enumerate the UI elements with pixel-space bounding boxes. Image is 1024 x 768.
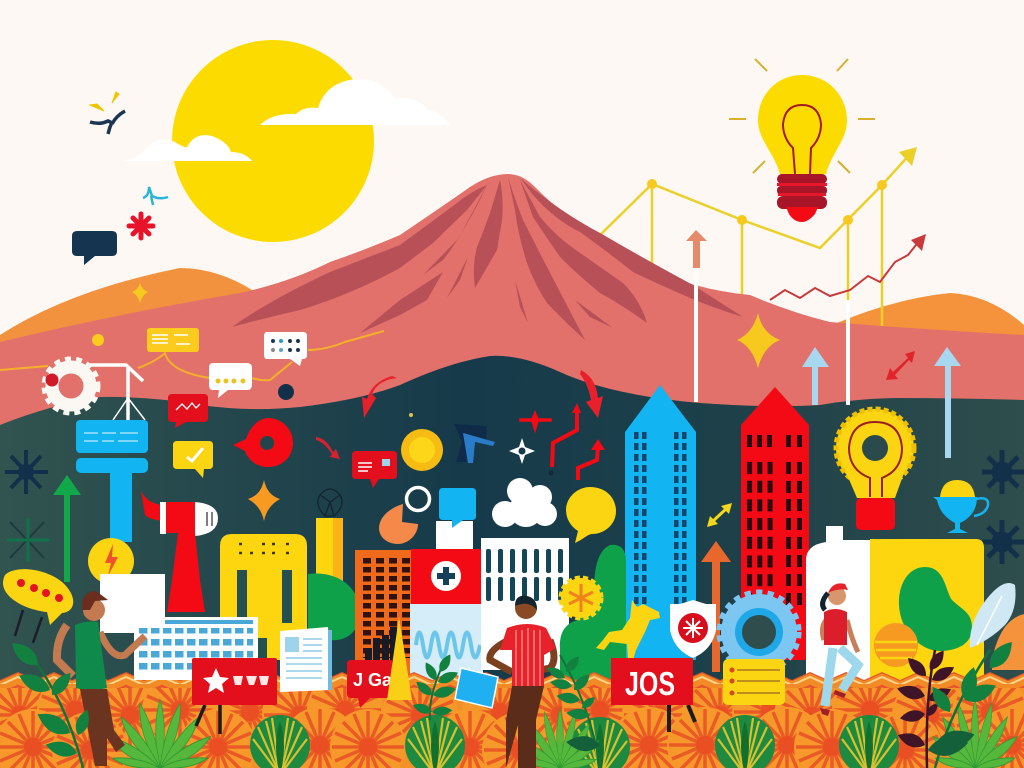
sign: red JGa: J Ga — [353, 670, 393, 690]
icon: shield — [670, 600, 716, 658]
arrow: yellow diagonal double — [707, 503, 732, 527]
icon: white dots bubble — [264, 332, 307, 366]
icon: lightning circle — [88, 538, 134, 584]
building: red medical — [411, 549, 481, 604]
ground base — [0, 684, 1024, 768]
icon: red asterisk — [129, 214, 153, 238]
arrow: white pole with orange head — [686, 230, 707, 402]
icon: red squiggle arrows — [548, 403, 605, 480]
icon: navy speech bubble — [72, 231, 117, 265]
icon: yellow check bubble — [173, 441, 213, 478]
icon: orange pie — [379, 504, 418, 544]
icon: red double arrow — [886, 351, 915, 380]
icon: white crane tower — [90, 365, 145, 420]
yellow checklist panel — [723, 659, 785, 705]
foliage: sprig by red shirt man — [545, 653, 601, 768]
green round tree — [308, 573, 360, 640]
sign: red JOS: JOS — [625, 665, 675, 702]
foliage: left sprig — [7, 637, 93, 768]
yellow triangle — [387, 617, 412, 700]
arrow: blue up left — [802, 347, 829, 405]
person: man in red shirt — [490, 596, 556, 768]
orange hill patch right — [992, 614, 1024, 670]
timeline orange path — [0, 331, 384, 380]
arrow: red small curved — [316, 437, 340, 459]
icon: white gear with red badge — [44, 359, 98, 413]
icon: red donut marker — [233, 418, 293, 467]
icon: blue square card — [455, 668, 498, 708]
icon: small star on hill — [132, 283, 148, 303]
arrow: red curved left — [362, 376, 397, 418]
arrow: orange up — [701, 541, 731, 672]
icon: yellow dot — [92, 334, 104, 346]
icon: white block — [436, 521, 473, 549]
icon: white sparkle — [509, 438, 535, 464]
building: pale blue with wave — [410, 604, 483, 680]
icon: light bulb — [729, 59, 875, 222]
sign: red JOS — [611, 658, 695, 732]
icon: blue cup — [933, 480, 988, 533]
palm plants — [110, 699, 1017, 768]
icon: blue gear — [721, 594, 797, 670]
tower: blue skyscraper — [625, 385, 696, 660]
icon: orange striped sun — [874, 623, 918, 667]
tower: red skyscraper — [741, 387, 809, 660]
document panel — [280, 627, 332, 692]
foliage: dark plum sprig — [895, 647, 957, 768]
icon: navy starburst right top — [982, 450, 1024, 494]
icon: green starburst left — [7, 518, 50, 562]
tower: small yellow — [316, 518, 343, 588]
green blob tree centre — [560, 545, 626, 690]
icon: red cross mark — [520, 412, 551, 431]
sign: red JGa — [347, 660, 393, 708]
icon: yellow gear bulb — [836, 409, 914, 530]
ground zigzag band — [0, 672, 1024, 688]
arrow: white pole behind — [846, 300, 850, 405]
icon: dark wire bulb — [318, 489, 342, 516]
sun — [172, 40, 374, 242]
icon: navy starburst right bottom — [982, 520, 1024, 564]
ground flower pattern — [0, 688, 1024, 768]
icon: white square sign — [100, 574, 165, 633]
icon: bird with ticks — [90, 92, 125, 134]
arrow: blue up right — [934, 347, 961, 458]
foliage: sprig by blue card — [411, 652, 460, 720]
yellow rising line chart — [600, 147, 917, 330]
icon: yellow round bubble — [566, 487, 616, 543]
building: white and yellow right — [806, 526, 984, 680]
green bean tree right — [899, 567, 972, 651]
icon: red media bubble — [352, 451, 397, 488]
mountain ridges — [232, 177, 743, 340]
icon: small cyan bird — [143, 187, 168, 205]
orange back hill right — [800, 293, 1024, 360]
icon: yellow gear flower — [561, 578, 601, 618]
person: man in green tank — [57, 591, 145, 766]
arrow: green up — [53, 475, 81, 582]
red trend line with arrow — [770, 234, 926, 300]
icon: yellow note bubble — [147, 328, 199, 352]
dark lower hill — [0, 356, 1024, 700]
icon: red chart bubble — [168, 394, 208, 428]
person: woman with red cap — [820, 583, 858, 716]
icon: yellow ellipse bubble on stand — [3, 569, 73, 643]
cloud: right — [260, 79, 450, 125]
icon: yellow four-point star — [737, 313, 780, 368]
icon: tiny speck — [409, 413, 413, 417]
icon: orange star — [248, 480, 280, 521]
building: orange grid — [355, 550, 413, 680]
icon: navy starburst left — [5, 450, 48, 494]
cloud: left — [123, 135, 252, 161]
icon: white cloud — [492, 478, 557, 527]
tower: cyan water tower — [76, 420, 148, 542]
icon: pale feather — [970, 583, 1016, 648]
icon: gold coin — [401, 429, 443, 471]
icon: white ellipsis bubble — [209, 363, 252, 398]
foliage: right green sprig — [926, 637, 1018, 768]
pink mountain and hill band — [0, 174, 1024, 440]
orange back hill left — [0, 268, 300, 360]
icon: navy dot — [278, 384, 294, 400]
calendar panel — [134, 617, 258, 680]
shrub row — [250, 715, 899, 768]
sign: red star rating — [192, 658, 277, 734]
icon: white ring — [406, 488, 430, 510]
building: white columns — [481, 538, 569, 670]
icon: red hairdryer machine — [141, 491, 218, 612]
icon: blue bubble — [439, 488, 476, 528]
icon: yellow deer — [596, 600, 660, 660]
building: yellow gate — [220, 534, 307, 660]
icon: navy and blue corner mark — [454, 424, 495, 463]
arrow: red curved right — [580, 370, 603, 418]
